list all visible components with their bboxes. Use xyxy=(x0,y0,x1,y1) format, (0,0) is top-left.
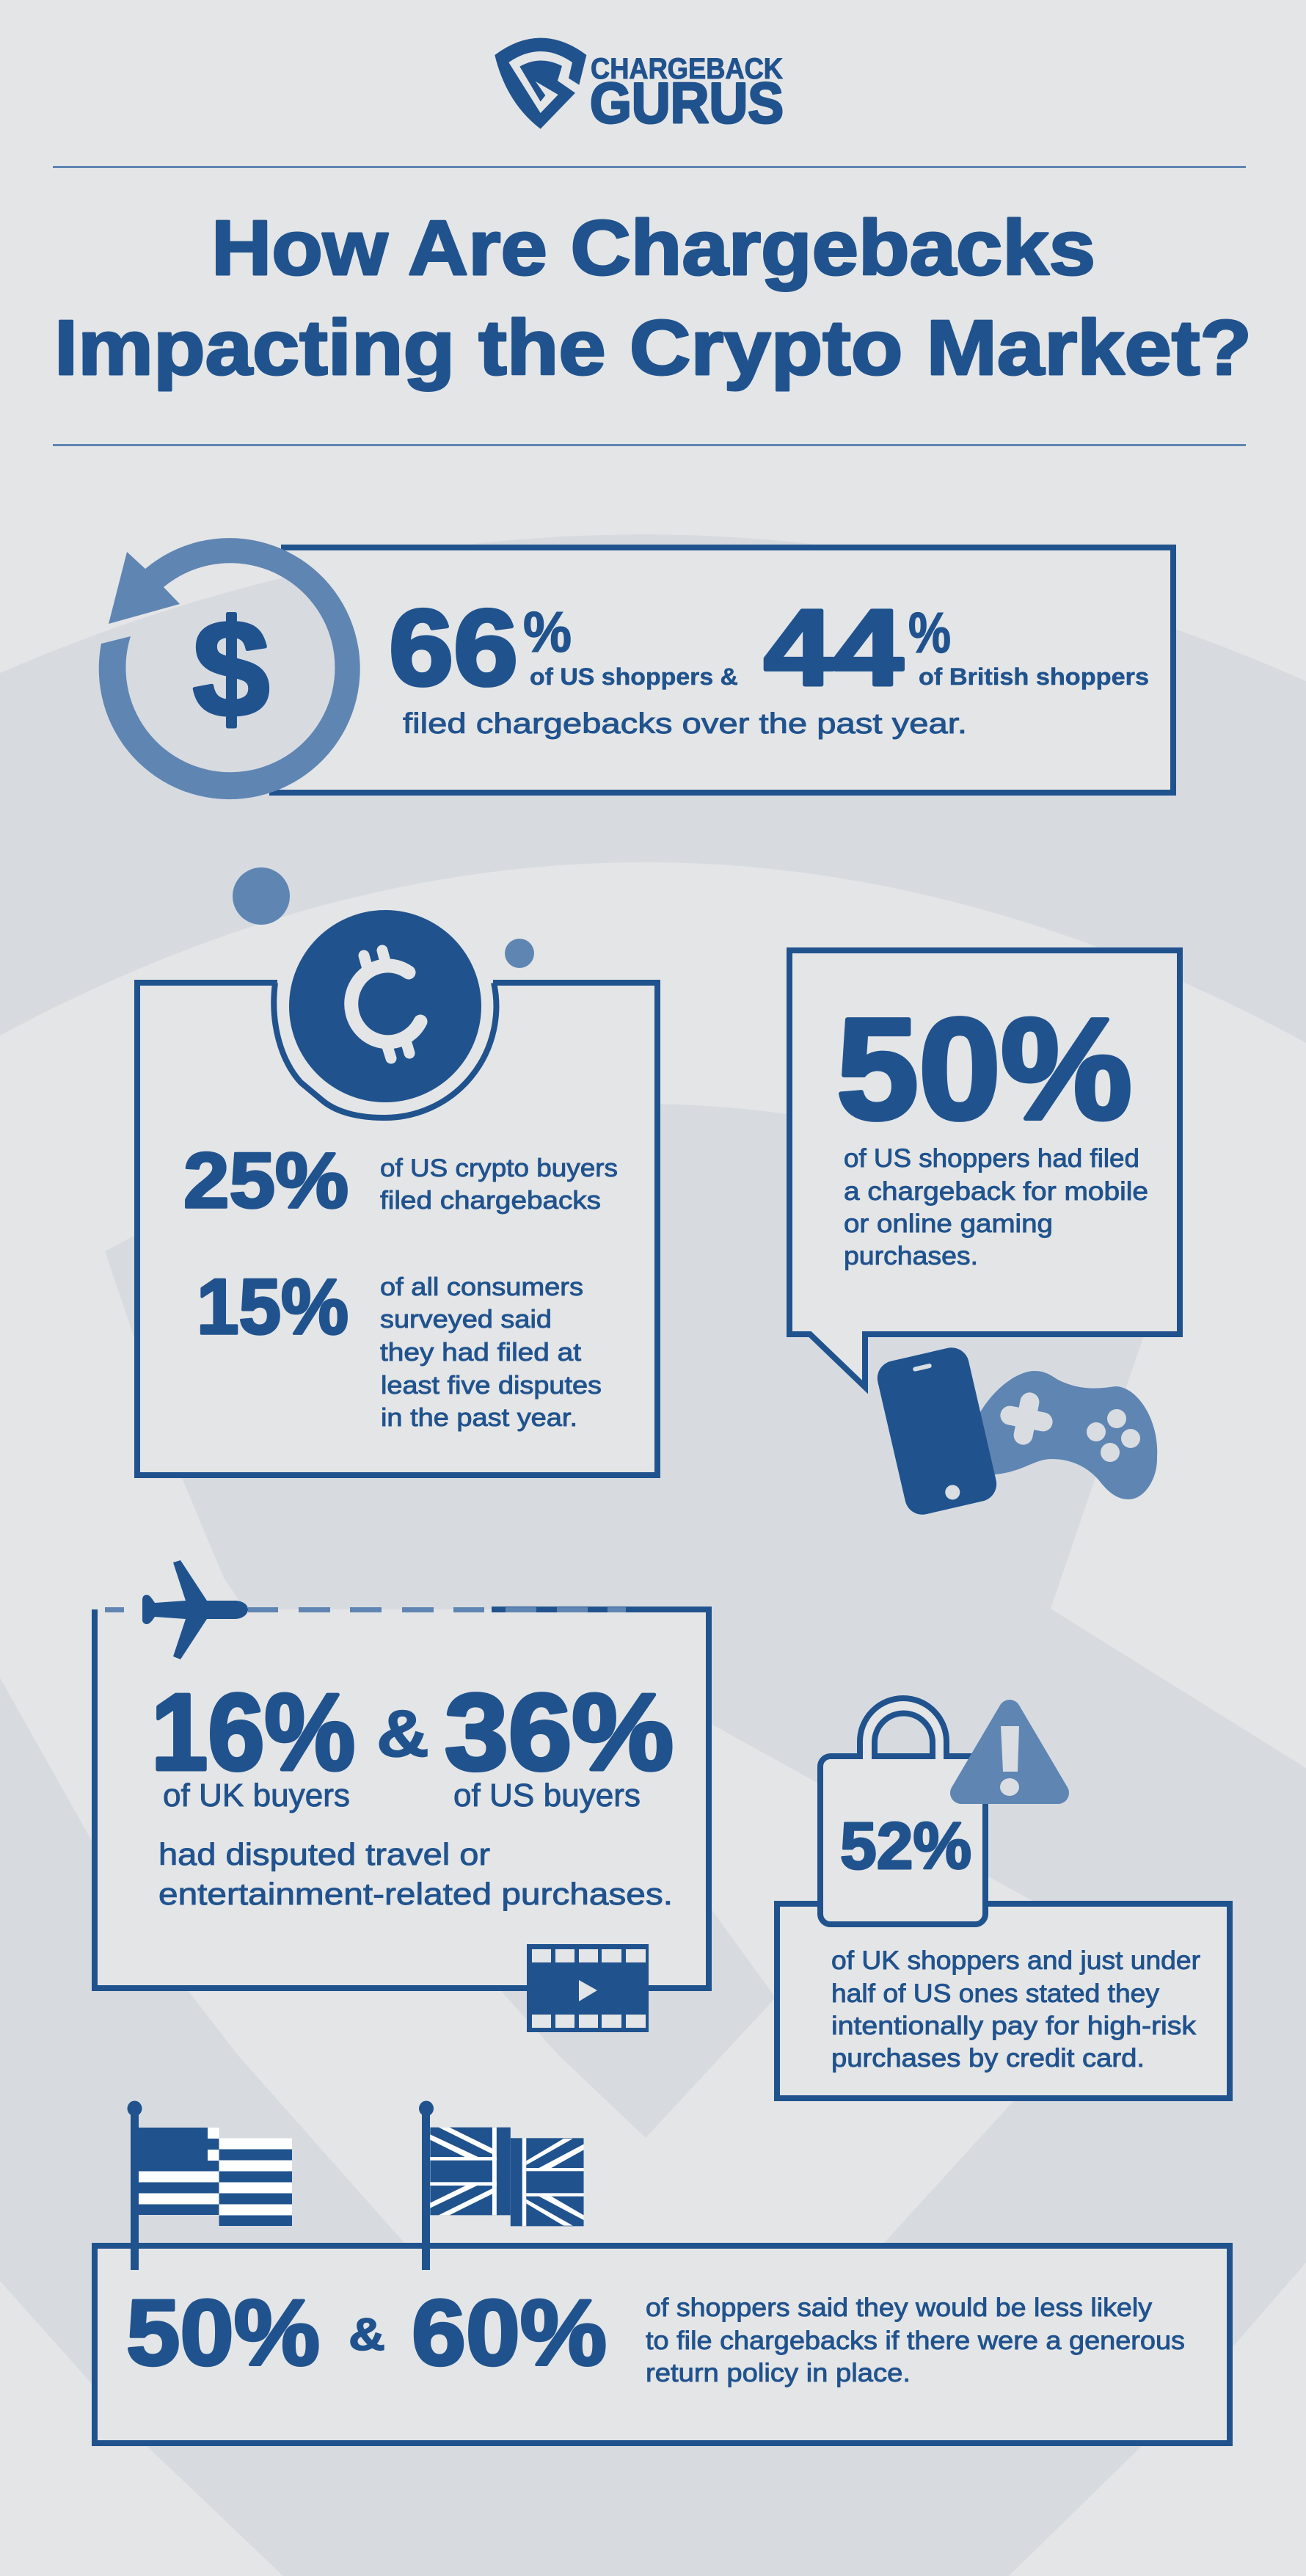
panel fill xyxy=(95,1609,709,1988)
stat: percent sign: % xyxy=(523,600,572,664)
ampersand: & xyxy=(376,1698,429,1771)
coin halo xyxy=(274,983,496,1118)
flag pole xyxy=(422,2114,430,2270)
panel: crypto buyers xyxy=(137,867,657,1475)
panel: mobile and gaming speech bubble xyxy=(789,950,1180,1387)
logo word: Chargeback: CHARGEBACK xyxy=(591,53,783,85)
flight path dashes xyxy=(105,1607,626,1612)
text: return policy: of shoppers said they would be less likely xyxy=(646,2293,1153,2322)
union jack panels xyxy=(430,2128,584,2226)
title line 1: How Are Chargebacks xyxy=(211,205,1095,291)
logo: Chargeback Gurus xyxy=(495,38,784,135)
panel: credit card high-risk purchases xyxy=(777,1698,1230,2098)
icon: smartphone xyxy=(874,1344,1000,1518)
panel: travel and entertainment xyxy=(95,1560,709,2032)
logo word: Gurus: GURUS xyxy=(590,70,784,135)
text: UK shoppers: of UK shoppers and just under xyxy=(831,1946,1200,1975)
stat: 50%: 50% xyxy=(836,989,1132,1149)
icon: shopping bag xyxy=(820,1698,985,1924)
speech bubble xyxy=(789,950,1180,1387)
label: US buyers: of US buyers xyxy=(453,1778,641,1813)
bag inner handle xyxy=(875,1713,933,1756)
text: gaming purchases: or online gaming xyxy=(844,1209,1053,1238)
text: consumers surveyed: they had filed at xyxy=(380,1339,582,1367)
controller buttons xyxy=(1087,1409,1140,1462)
panel frame xyxy=(95,2246,1230,2443)
panel border xyxy=(95,1609,709,1988)
icon: UK flag xyxy=(419,2100,584,2270)
stat: 50%: 50% xyxy=(126,2280,320,2384)
phone speaker xyxy=(913,1363,932,1372)
coin disc xyxy=(289,910,481,1102)
flag pole xyxy=(131,2114,139,2270)
text: consumers surveyed: in the past year. xyxy=(381,1404,577,1432)
icon: coin xyxy=(289,910,481,1102)
icon: shield logo mark xyxy=(495,38,586,129)
exclamation dot xyxy=(1000,1778,1019,1796)
decorative dot large xyxy=(233,867,290,925)
icon: circular refund arrow xyxy=(99,538,360,799)
text: consumers surveyed: surveyed said xyxy=(380,1306,552,1334)
label: UK buyers: of UK buyers xyxy=(163,1778,350,1813)
stat: percent sign: % xyxy=(908,600,951,665)
controller d-pad xyxy=(1007,1399,1046,1438)
panel border xyxy=(269,547,1173,793)
icon: game controller xyxy=(976,1371,1157,1499)
text: crypto buyers: filed chargebacks xyxy=(380,1187,601,1215)
film perforations xyxy=(532,1949,646,2028)
ampersand: & xyxy=(349,2310,385,2360)
stat: 15%: 15% xyxy=(197,1262,349,1350)
stat: 16%: 16% xyxy=(151,1672,355,1793)
text: crypto buyers xyxy=(380,1154,618,1215)
stat: 25%: 25% xyxy=(183,1136,349,1224)
text: return policy: to file chargebacks if there were a generous xyxy=(646,2326,1185,2355)
text: disputed purchases: entertainment-related purchases. xyxy=(158,1877,673,1911)
stat: 44: 44 xyxy=(764,588,903,708)
text: gaming purchases: purchases. xyxy=(844,1242,978,1270)
stat: 36%: 36% xyxy=(445,1672,674,1793)
pole finial xyxy=(419,2100,434,2117)
title rule top xyxy=(53,166,1246,168)
play triangle xyxy=(579,1980,597,2001)
panel frame xyxy=(137,983,657,1475)
decorative dot small xyxy=(505,939,534,968)
cover of frame line behind halo xyxy=(277,976,493,987)
panel: generous return policy xyxy=(95,2246,1230,2443)
title line 2: Impacting the Crypto Market? xyxy=(54,305,1252,391)
text: UK shoppers: half of US ones stated they xyxy=(831,1979,1160,2008)
text: gaming purchases: a chargeback for mobile xyxy=(844,1177,1148,1206)
panel frame xyxy=(777,1904,1230,2098)
stat label: British shoppers: of British shoppers xyxy=(919,663,1149,690)
text: gaming purchases: of US shoppers had filed xyxy=(844,1144,1139,1173)
text: return policy xyxy=(646,2293,1185,2387)
icon: warning triangle xyxy=(961,1711,1058,1796)
stat: 52%: 52% xyxy=(840,1810,971,1883)
text: disputed purchases xyxy=(158,1837,673,1911)
film body xyxy=(527,1944,649,2032)
controller body xyxy=(976,1371,1157,1499)
stat label: US shoppers: of US shoppers & xyxy=(530,663,738,690)
crypto symbol xyxy=(351,950,420,1058)
text: UK shoppers xyxy=(831,1946,1200,2073)
panel fill xyxy=(244,547,1173,793)
text: UK shoppers: intentionally pay for high-risk xyxy=(831,2012,1197,2040)
statement: filed chargebacks over the past year. xyxy=(403,708,967,740)
text: UK shoppers: purchases by credit card. xyxy=(831,2044,1145,2073)
bag outline xyxy=(820,1698,985,1924)
icon: dollar sign: $ xyxy=(193,592,269,746)
icon: US flag xyxy=(128,2100,292,2270)
background: oversized shield watermark xyxy=(0,534,1306,2576)
flag stripes xyxy=(139,2128,292,2226)
text: consumers surveyed xyxy=(380,1273,602,1432)
text: consumers surveyed: of all consumers xyxy=(380,1273,583,1301)
exclamation bar xyxy=(1001,1726,1019,1772)
icon: film strip with play button xyxy=(527,1944,649,2032)
phone home button xyxy=(944,1483,961,1501)
text: return policy: return policy in place. xyxy=(646,2359,911,2387)
pole finial xyxy=(128,2100,142,2117)
text: disputed purchases: had disputed travel or xyxy=(158,1837,490,1871)
panel: shoppers who filed chargebacks xyxy=(99,538,1173,799)
text: gaming purchases xyxy=(844,1144,1148,1270)
text: crypto buyers: of US crypto buyers xyxy=(380,1154,618,1182)
title rule bottom xyxy=(53,444,1246,446)
stat: 60%: 60% xyxy=(412,2280,607,2384)
phone body xyxy=(874,1344,1000,1518)
warning body xyxy=(961,1711,1058,1793)
cover of handle base line xyxy=(863,1753,872,1760)
icon: airplane xyxy=(142,1560,248,1659)
stat: 66: 66 xyxy=(389,588,518,708)
title block xyxy=(53,166,1252,446)
text: consumers surveyed: least five disputes xyxy=(381,1372,602,1400)
